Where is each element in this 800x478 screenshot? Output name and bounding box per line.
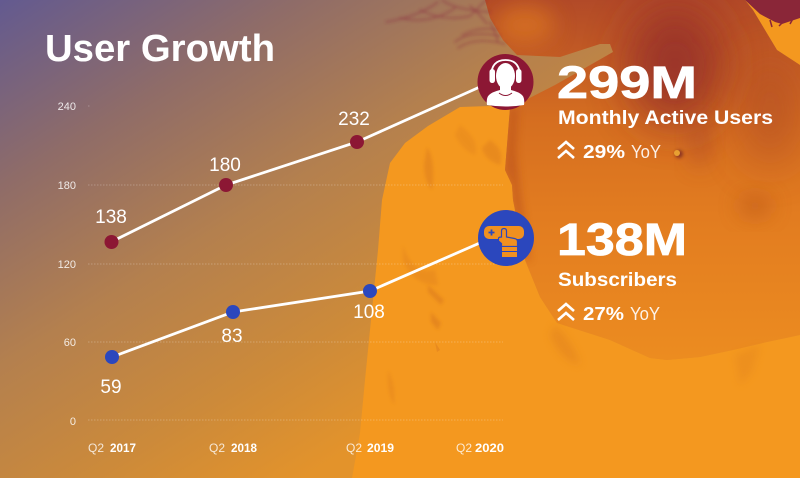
grid lines: [88, 106, 503, 420]
x axis labels: 2017: [110, 441, 136, 455]
y axis labels: 60: [64, 337, 76, 349]
top-right hair: [745, 0, 800, 27]
x axis labels: Q2: [456, 441, 472, 455]
icon: headset user: [478, 54, 534, 110]
icon: button press: [478, 210, 534, 266]
line series: monthly active users: 180: [209, 155, 241, 176]
top-right blouse patch: [745, 0, 800, 65]
line series: subscribers: [100, 242, 482, 398]
x axis labels: Q2: [209, 441, 225, 455]
x axis labels: Q2: [346, 441, 362, 455]
x axis labels: 2019: [367, 441, 394, 455]
skin: [485, 0, 800, 360]
line series: monthly active users: 138: [95, 207, 127, 228]
stat: subscribers: Subscribers: [558, 270, 677, 291]
blouse folds: [388, 125, 760, 405]
y axis labels: [58, 101, 76, 428]
blouse shape: [352, 106, 800, 478]
line series: monthly active users: [95, 86, 482, 249]
stat: monthly active users: 29%: [583, 142, 625, 162]
skin shading: [495, 5, 796, 260]
stat: monthly active users: YoY: [631, 142, 661, 162]
photo: woman with blouse: [352, 0, 800, 478]
x axis labels: 2018: [231, 441, 257, 455]
stat: subscribers: [557, 214, 687, 324]
y axis labels: 120: [58, 259, 76, 271]
y axis labels: 180: [58, 180, 76, 192]
y axis labels: 240: [58, 101, 76, 113]
stat: monthly active users: Monthly Active Users: [558, 108, 773, 129]
x axis labels: [88, 441, 504, 455]
stat: monthly active users: [557, 57, 773, 162]
stat: subscribers: 138M: [557, 214, 687, 265]
line series: subscribers: 83: [221, 326, 243, 347]
line series: monthly active users: 232: [338, 109, 370, 130]
line series: subscribers: 59: [100, 377, 122, 398]
x axis labels: 2020: [475, 441, 504, 455]
title: User Growth: [45, 28, 275, 70]
pendant: [675, 150, 683, 158]
x axis labels: Q2: [88, 441, 104, 455]
line series: subscribers: 108: [353, 302, 385, 323]
y axis labels: 0: [70, 416, 76, 428]
stat: subscribers: 27%: [583, 304, 624, 324]
hair strands: [386, 0, 505, 48]
stat: monthly active users: 299M: [557, 57, 697, 108]
stat: subscribers: YoY: [630, 304, 660, 324]
